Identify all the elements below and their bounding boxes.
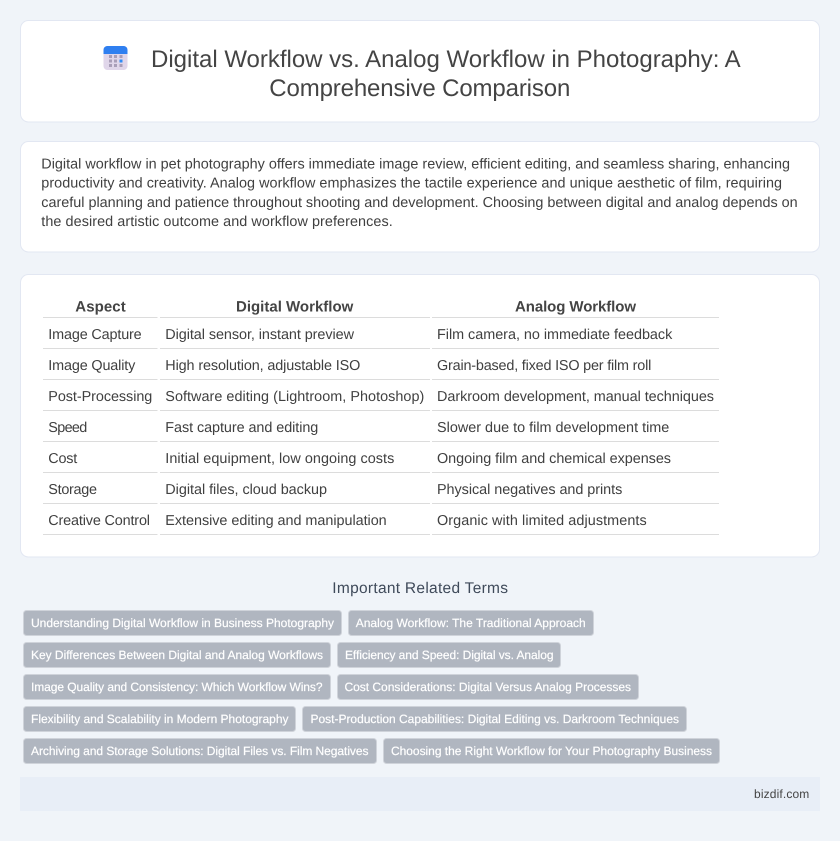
- row: Creative Control: Extensive editing and manipulation: [165, 513, 387, 529]
- panel: intro paragraph: productivity and creativity. Analog workflow emphasizes the tactile experience and unique aesthetic of film, requiring: [41, 176, 782, 192]
- row: Post-Processing: [43, 389, 719, 411]
- icon: calendar: [104, 46, 128, 70]
- title text: Comprehensive Comparison: [269, 75, 570, 102]
- table header row: Aspect: [75, 299, 126, 316]
- tag: Choosing the Right Workflow: [384, 738, 720, 764]
- row: Creative Control: Organic with limited adjustments: [437, 513, 647, 529]
- tag: Image Quality and Consistency: Image Quality and Consistency: Which Workflow Wins?: [31, 680, 323, 694]
- row: Image Capture: Image Capture: [48, 327, 142, 343]
- tag: Cost Considerations: Cost Considerations: Digital Versus Analog Processes: [344, 680, 631, 694]
- row: Cost: Ongoing film and chemical expenses: [437, 451, 671, 467]
- row: Image Capture: [43, 327, 719, 349]
- row: Image Quality: Grain-based, fixed ISO per film roll: [437, 358, 651, 374]
- row: Creative Control: [43, 513, 719, 535]
- row: Storage: Digital files, cloud backup: [165, 482, 327, 498]
- tag: Understanding Digital Workflow: Understanding Digital Workflow in Business Photography: [31, 616, 334, 630]
- panel: title card: [20, 20, 820, 122]
- tag: Archiving and Storage: Archiving and Storage Solutions: Digital Files vs. Film Negatives: [31, 744, 368, 758]
- tag: Archiving and Storage: [24, 738, 376, 764]
- tag: Key Differences: [24, 642, 330, 668]
- table header row: [43, 299, 719, 318]
- row: Post-Processing: Darkroom development, manual techniques: [437, 389, 714, 405]
- tag: Post-Production Capabilities: [302, 706, 686, 732]
- panel: intro paragraph: the desired artistic outcome and workflow preferences.: [41, 214, 393, 230]
- row: Cost: Initial equipment, low ongoing costs: [165, 451, 394, 467]
- panel: related term tags: [24, 610, 720, 764]
- row: Speed: Speed: [48, 420, 87, 436]
- tag: Efficiency and Speed: [338, 642, 560, 668]
- row: Image Quality: [43, 358, 719, 380]
- row: Storage: Storage: [48, 482, 97, 498]
- row: Image Capture: Digital sensor, instant preview: [165, 327, 355, 343]
- tag: Image Quality and Consistency: [24, 674, 330, 700]
- panel: comparison table: [20, 274, 820, 557]
- row: Image Quality: Image Quality: [48, 358, 136, 374]
- row: Post-Processing: Software editing (Lightroom, Photoshop): [165, 389, 424, 405]
- row: Speed: Slower due to film development time: [437, 420, 669, 436]
- row: Storage: Physical negatives and prints: [437, 482, 622, 498]
- panel: intro paragraph: Digital workflow in pet photography offers immediate image review, efficient editing, and seamless sharing, enhancing: [41, 156, 790, 172]
- panel: intro paragraph: [20, 142, 820, 252]
- title text: Digital Workflow vs. Analog Workflow in Photography: A: [151, 46, 741, 73]
- panel: intro paragraph: careful planning and patience throughout shooting and development. Choosing between digital and analog depends on: [41, 195, 798, 211]
- row: Speed: [43, 420, 719, 442]
- tag: Key Differences: Key Differences Between Digital and Analog Workflows: [31, 648, 323, 662]
- row: Image Quality: High resolution, adjustable ISO: [165, 358, 360, 374]
- row: Cost: [43, 451, 719, 473]
- tag: Post-Production Capabilities: Post-Production Capabilities: Digital Editing vs. Darkroom Techniques: [310, 712, 679, 726]
- row: Storage: [43, 482, 719, 504]
- tag: Efficiency and Speed: Efficiency and Speed: Digital vs. Analog: [345, 648, 554, 662]
- tag: Choosing the Right Workflow: Choosing the Right Workflow for Your Photography Business: [391, 744, 712, 758]
- row: Cost: Cost: [48, 451, 77, 467]
- row: Image Capture: Film camera, no immediate feedback: [437, 327, 673, 343]
- row: Post-Processing: Post-Processing: [48, 389, 152, 405]
- table header row: Digital Workflow: [236, 299, 354, 316]
- tag: Flexibility and Scalability: Flexibility and Scalability in Modern Photography: [31, 712, 288, 726]
- title text: [151, 46, 741, 102]
- tag: Analog Workflow: [348, 610, 594, 636]
- heading: Important Related Terms: Important Related Terms: [332, 580, 508, 597]
- tag: Flexibility and Scalability: [24, 706, 296, 732]
- footer bar: [20, 777, 820, 811]
- tag: Analog Workflow: Analog Workflow: The Traditional Approach: [356, 616, 586, 630]
- table header row: Analog Workflow: [515, 299, 636, 316]
- row: Speed: Fast capture and editing: [165, 420, 318, 436]
- row: Creative Control: Creative Control: [48, 513, 150, 529]
- tag: Understanding Digital Workflow: [24, 610, 342, 636]
- footer bar: bizdif.com: [754, 787, 809, 801]
- tag: Cost Considerations: [338, 674, 638, 700]
